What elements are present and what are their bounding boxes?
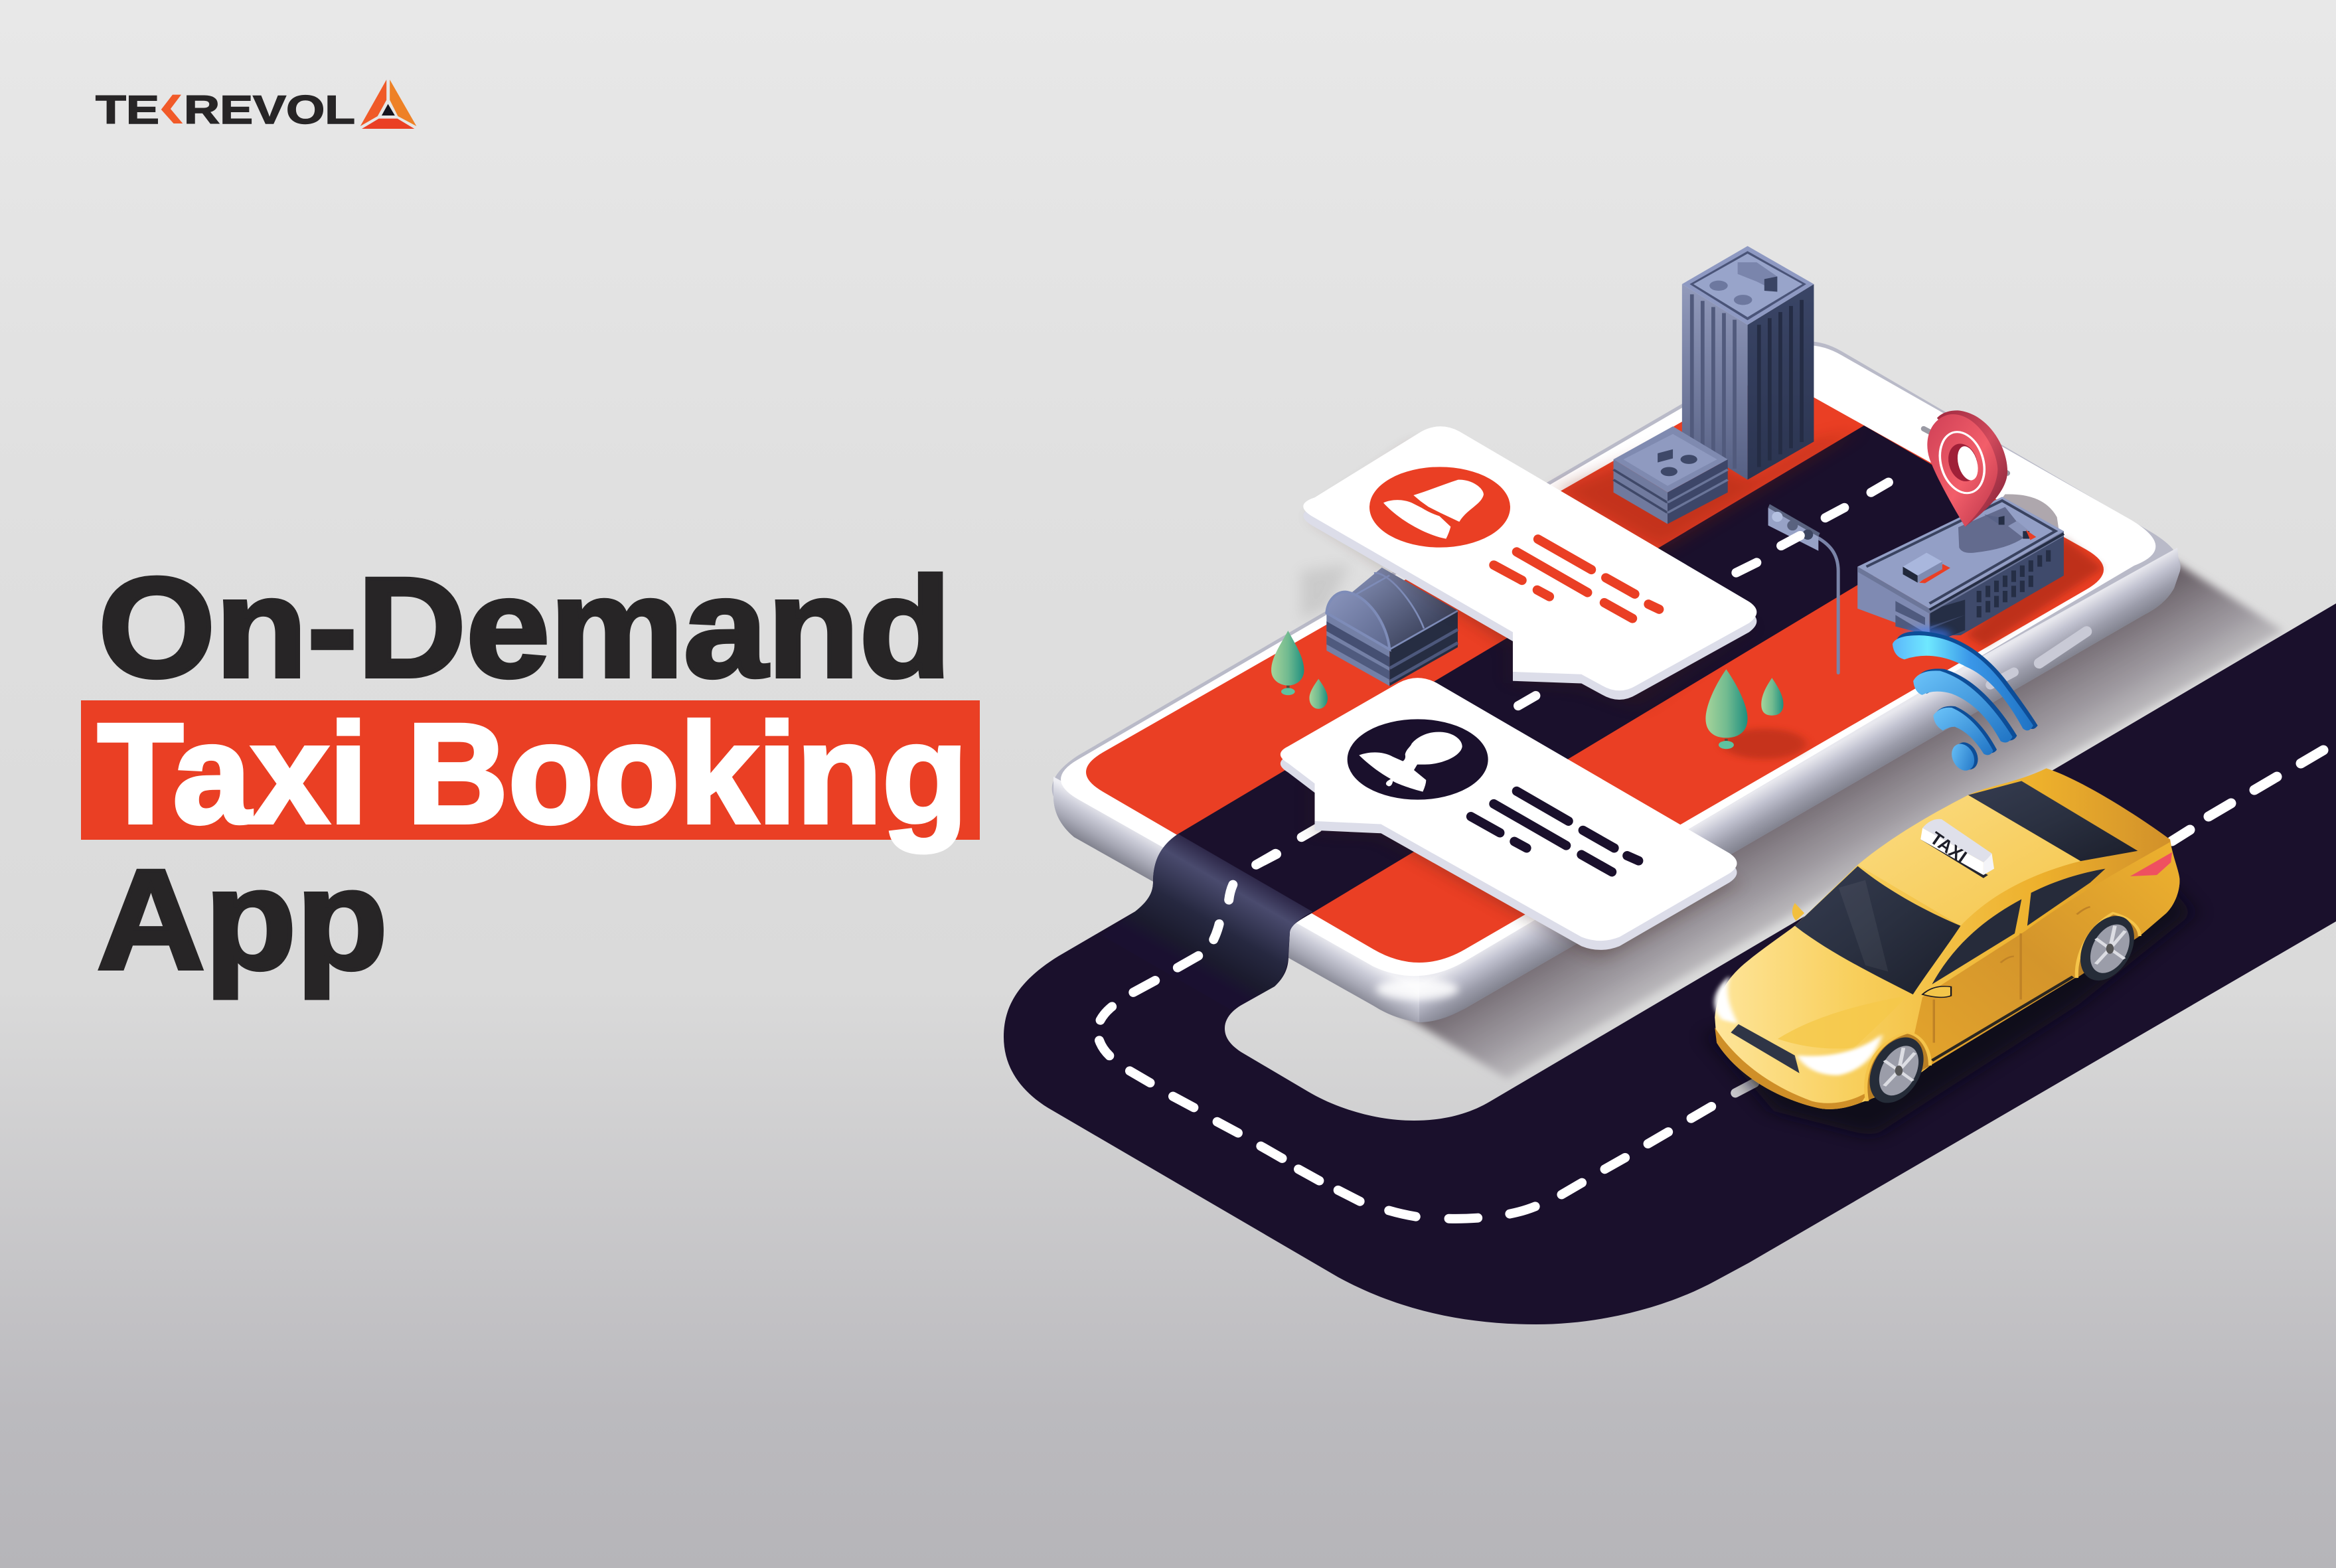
door lines and handles <box>1934 907 2090 1043</box>
car shadow <box>1709 883 2193 1137</box>
dome ribs <box>1356 573 1458 649</box>
heading line: App: App <box>97 840 388 999</box>
location pin <box>1927 410 2007 527</box>
road dashes: lower loop <box>1099 828 1754 1219</box>
headlights <box>1715 975 1738 1024</box>
smartphone <box>1052 341 2181 1022</box>
icon: wifi signal <box>1893 627 2038 773</box>
wifi outer arc <box>1893 631 2038 730</box>
dome arch face <box>1326 592 1389 649</box>
bubble shadow <box>1314 441 1749 708</box>
bubble face <box>1281 678 1737 941</box>
office building <box>1857 497 2064 639</box>
traffic light <box>1768 504 1838 672</box>
sill <box>1932 977 2073 1061</box>
road dashes: on phone <box>1518 482 1889 706</box>
car body <box>1715 768 2180 1109</box>
tree shadows <box>1723 729 1806 759</box>
message lines <box>1471 791 1638 872</box>
rear window <box>1968 781 2138 861</box>
phone body <box>1052 341 2181 1020</box>
rear wheel arch <box>2076 913 2140 978</box>
chat bubble: bottom <box>1256 678 1737 960</box>
roof <box>1857 795 2080 926</box>
logo: TEKREVOL <box>96 80 416 132</box>
phone screen <box>1086 382 2104 963</box>
chat bubble: top <box>1303 426 1756 708</box>
dome building <box>1301 564 1458 686</box>
tree: small right <box>1761 678 1784 716</box>
phone right side <box>1419 548 2180 1022</box>
tail light <box>2130 852 2172 876</box>
side windows <box>1932 899 2021 984</box>
windshield reflections <box>1839 880 1888 972</box>
grille <box>1731 1024 1800 1073</box>
bubble shadow <box>1314 696 1736 960</box>
title <box>81 548 980 999</box>
heading line: On-Demand: On-Demand <box>98 548 951 707</box>
bubble thickness <box>1303 435 1756 700</box>
wifi inner arc <box>1933 706 1997 755</box>
phone side buttons <box>1990 631 2086 685</box>
front bumper <box>1715 1028 1869 1109</box>
bubble thickness <box>1281 687 1737 950</box>
office building with pin <box>1857 410 2103 647</box>
phone top face <box>1061 345 2155 976</box>
dome shadow on background <box>1301 564 1350 619</box>
phone corner highlights <box>1376 979 1458 1000</box>
wifi middle arc <box>1913 668 2017 743</box>
hood highlight <box>1778 996 1907 1049</box>
wifi glow <box>1905 627 1952 643</box>
tree: large right <box>1705 669 1748 749</box>
shadow beside tower <box>1555 429 1859 551</box>
front wheel <box>1860 1034 1933 1107</box>
road fold over phone edge <box>1102 834 1312 1010</box>
speaker slot <box>1924 429 2007 473</box>
message lines <box>1494 539 1659 619</box>
avatar: red circle <box>1369 467 1510 548</box>
pin shadow on bezel <box>2002 494 2059 531</box>
logo: TEKREVOL: TE <box>96 88 159 132</box>
building shadow on screen <box>1966 538 2103 647</box>
taxi roof sign <box>1920 819 1994 878</box>
logo: TEKREVOL: REVOL <box>184 88 355 132</box>
bubble face <box>1303 426 1756 690</box>
city scene on phone <box>1271 246 1859 759</box>
dome right base <box>1389 611 1458 686</box>
tower <box>1682 246 1814 480</box>
mirrors <box>1792 903 1804 921</box>
avatar: dark circle <box>1348 719 1488 800</box>
highlight bar <box>81 700 980 840</box>
heading line: Taxi Booking: Taxi Booking <box>98 694 968 853</box>
road <box>1004 426 2336 1324</box>
dome roof <box>1350 568 1458 649</box>
car side panels <box>1903 842 2180 1083</box>
low building <box>1614 426 1728 524</box>
taxi car <box>1709 768 2193 1137</box>
front wheel arch <box>1866 1032 1930 1101</box>
windshield <box>1795 866 1960 994</box>
phone shadow <box>1377 561 2284 1079</box>
phone left side <box>1053 777 1419 1022</box>
taxi sign text: TAXI <box>1926 828 1970 867</box>
tree: large left <box>1271 631 1304 695</box>
wifi dot <box>1948 740 1982 773</box>
dome left base <box>1326 613 1389 686</box>
tree: small left <box>1309 679 1328 709</box>
road surface <box>1004 426 2336 1324</box>
road dashes: right <box>2172 750 2323 841</box>
rear wheel <box>2071 912 2143 984</box>
road dash near tail <box>1256 854 1277 865</box>
